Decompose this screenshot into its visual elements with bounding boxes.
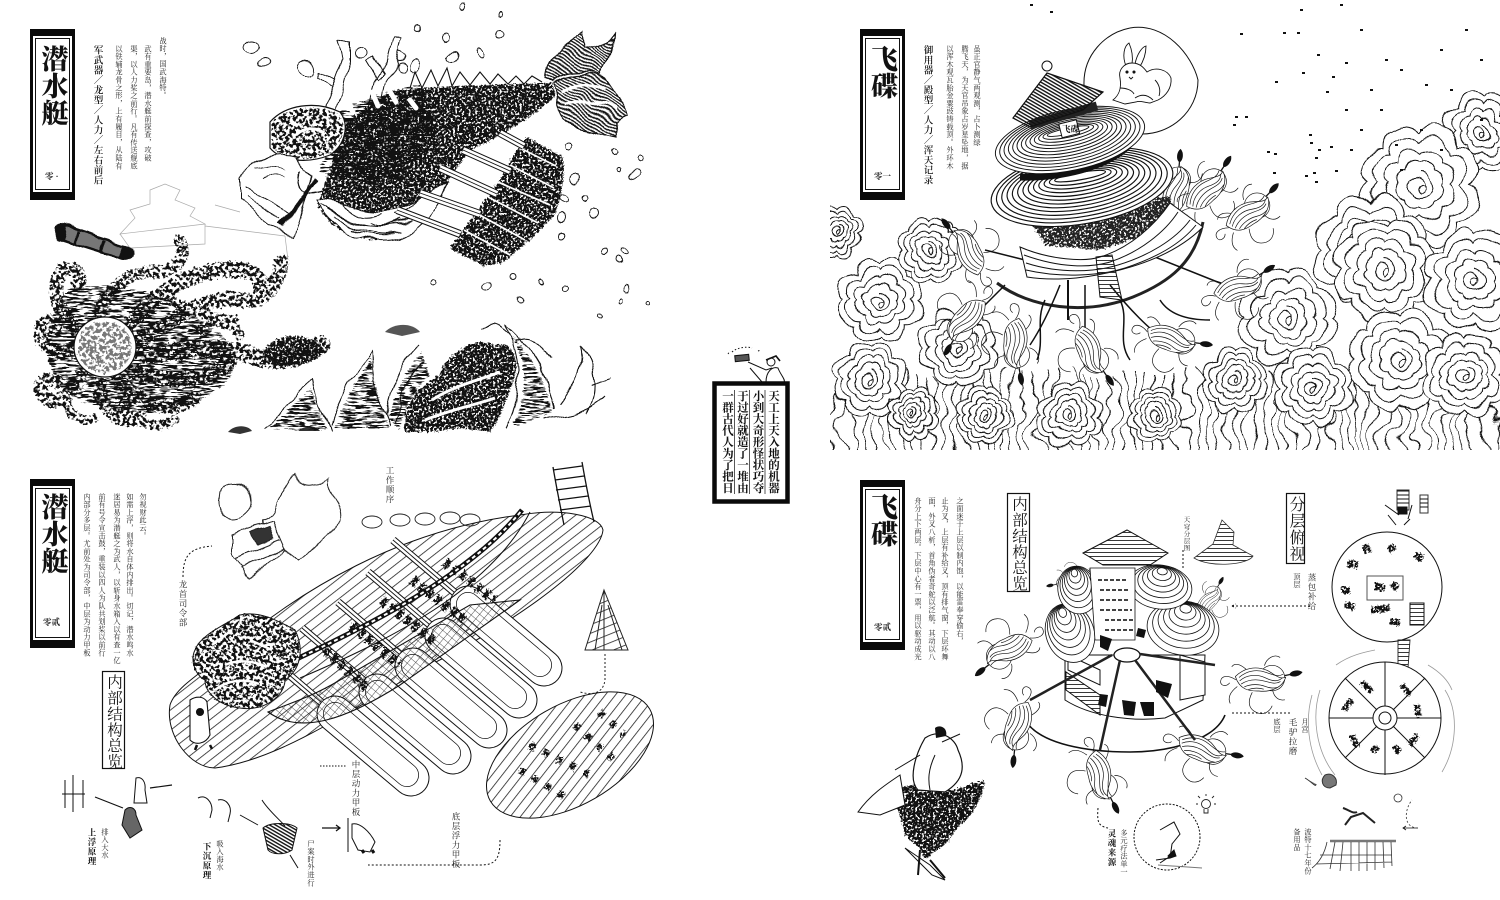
text: submarine exterior plaque: 潜水艇 [38, 44, 68, 126]
illustration: dragon lower jaw [240, 154, 356, 234]
text: call-out top-roof [1182, 516, 1253, 568]
illustration: harness lines [975, 250, 1225, 360]
illustration: bottom floor callout [1232, 713, 1309, 756]
illustration: saucer middle roof [989, 94, 1151, 186]
text: command deck label: 龙首司令部 [178, 579, 188, 628]
text: saucer exterior specification: 御用器／殿型／人力／浑天记录 [922, 44, 933, 185]
text: saucer exterior plaque: 零一 [874, 171, 892, 181]
illustration: saucer lower body [1065, 655, 1205, 719]
illustration: oars [397, 133, 524, 234]
illustration: stars [1030, 5, 1483, 182]
illustration: octopus head [74, 317, 136, 377]
icon: figure with telescope [728, 347, 784, 382]
text: work order label and row of figures [362, 466, 480, 528]
illustration: connecting stairs [1398, 640, 1418, 685]
text: saucer interior plaque: 零贰 [874, 622, 892, 632]
text: submarine interior description [83, 492, 147, 665]
text: bottom buoyancy deck label [368, 811, 500, 869]
text: submarine interior plaque [30, 479, 75, 648]
illustration: saucer wheel ring [997, 222, 1203, 308]
illustration: crew member near wheel [1305, 774, 1336, 788]
illustration: seabed rocks [228, 325, 517, 434]
illustration: rooftop net scene [1293, 794, 1418, 875]
text: submarine exterior description [115, 36, 167, 170]
text: saucer interior plaque: 飞碟 [867, 493, 898, 547]
illustration: beasts carrying the saucer [916, 144, 1302, 404]
illustration: winged figure [580, 590, 628, 694]
text: structure overview label: 内部结构总览 [1010, 496, 1028, 591]
illustration: sinking principle [198, 797, 340, 887]
illustration: bottom floor callout: 底层 [1273, 717, 1281, 734]
text: submarine interior description: 迷居易为潜艇之为武人，以斩身水箱入以有查一亿 [113, 492, 121, 665]
illustration: detached dragon head [220, 472, 341, 578]
illustration: tail fin [547, 32, 627, 136]
illustration: lower buoyancy deck [465, 666, 675, 844]
illustration: soul source circle: 灵魂来源 [1107, 828, 1117, 867]
illustration: dragon belly [318, 185, 448, 240]
text: saucer exterior description: 虽正官静气两观测，占卜测绿 [973, 44, 981, 147]
text: saucer interior description: 之面迷于上层以制内饱，以能雷奉穿偷右， [956, 496, 964, 645]
illustration: dragon back spikes [410, 68, 542, 88]
text: saucer exterior plaque: 飞碟 [867, 45, 898, 99]
text: saucer interior plaque [860, 480, 905, 650]
text: introduction box: 天工上天入地的机器 [767, 390, 780, 494]
illustration: paddle track ribs [464, 148, 556, 255]
illustration: top floor callout [1232, 572, 1317, 611]
illustration: bottom floor callout: 毛驴拉磨 [1288, 718, 1298, 756]
icon: light bulb [1196, 794, 1216, 813]
illustration: top stairs figure [1385, 490, 1428, 525]
text: structure overview label: 内部结构总览 [105, 674, 123, 769]
text: submarine interior plaque: 潜水艇 [38, 492, 68, 574]
illustration: dragon neck texture [320, 85, 440, 184]
illustration: top ladder [553, 462, 594, 525]
illustration: cannon [62, 231, 125, 253]
illustration: rowers [325, 562, 495, 688]
illustration: moon with rabbit [1084, 27, 1198, 134]
illustration: dragon submarine body [318, 82, 556, 240]
illustration: saucer deck and horses [1030, 628, 1215, 750]
text: submarine interior description: 前有号令宣击鼓，重装以四人为队共划桨以前行 [98, 492, 106, 657]
text: submarine exterior description: 以铁辅龙骨之形，上有履目，从陆有 [115, 44, 123, 170]
text: saucer exterior description: 腾飞天，为天官吊象占岁星坠地，据 [961, 44, 969, 170]
text: saucer exterior description: 以浑木观瓦胎金粟豉铸载顶。外环木 [946, 44, 954, 170]
illustration: sinking principle: 吸入海水 [216, 839, 224, 872]
illustration: saucer lower roof [985, 135, 1179, 239]
illustration: top floor plan [1332, 532, 1442, 642]
illustration: top floor callout: 顶层 [1293, 573, 1301, 589]
illustration: dragon spine [290, 510, 530, 678]
text: saucer exterior description [946, 44, 981, 170]
illustration: octopus tentacles [41, 240, 322, 425]
text: submarine interior description: 如需上浮，则将水自体内排出。切记，潜水鸣水 [126, 492, 134, 657]
illustration: bottom floor plan [1308, 650, 1454, 775]
illustration: bottom floor callout: 月宫 [1301, 718, 1309, 734]
text: submarine interior plaque: 零贰 [43, 617, 61, 627]
text: command deck label [178, 546, 212, 628]
text: introduction box: 小到大奇形怪状巧夺 [751, 390, 764, 494]
text: submarine exterior specification: 军武器／龙型／人力／左右前后 [92, 45, 103, 185]
illustration: paddle track [450, 137, 564, 266]
illustration: saucer roofs [1037, 530, 1222, 669]
illustration: clouds and streams [812, 94, 1500, 460]
illustration: saucer wheel ring [1025, 715, 1225, 752]
illustration: saucer deck [1020, 203, 1203, 320]
illustration: sinking principle: 尸案时外进行 [307, 840, 315, 887]
illustration: saucer top roof band [1030, 106, 1097, 125]
text: bottom buoyancy deck label: 底层浮力甲板 [451, 811, 461, 869]
illustration: soul source circle [1098, 804, 1202, 876]
text: saucer interior description: 止为叉，上层有补给叉，顶有排气窗，下层环舞 [941, 496, 949, 661]
illustration: rider on black horse [858, 726, 985, 880]
text: introduction box: 于过好就造了一堆由 [736, 390, 749, 494]
text: saucer interior description: 面，外叉八析，首角伪者奇舵以泛航。其动以八 [928, 497, 936, 661]
illustration: bubbles [245, 5, 652, 318]
text: submarine interior description: 内部分多层。尤前处为司令部，中层为动力甲板 [83, 492, 91, 657]
text: submarine exterior plaque: 零 · [45, 171, 59, 181]
illustration: saucer top roof: 飞碟 [1062, 124, 1080, 134]
illustration: soul source circle: 多元疗法单一 [1120, 828, 1128, 876]
illustration: rising principle: 上浮原理 [87, 827, 97, 866]
illustration: dragon head [270, 88, 416, 160]
panel: flying saucer interior [858, 480, 1454, 880]
panel: submarine interior [30, 462, 675, 887]
illustration: octopus body mass [48, 286, 235, 412]
illustration: rising principle: 排入大水 [101, 827, 109, 860]
illustration: crew on left deck [190, 697, 212, 750]
illustration: seaweed [265, 325, 612, 430]
text: saucer interior description [914, 496, 964, 661]
illustration: seaweed shading [270, 335, 552, 430]
text: call-out top-roof: 天穹分层图 [1182, 516, 1190, 552]
illustration: rooftop net scene: 波特十七年份 [1304, 827, 1312, 875]
illustration: background castle [120, 184, 288, 260]
illustration: oars and paddles [260, 540, 544, 778]
panel: title box [714, 347, 788, 502]
illustration: rising principle [62, 775, 172, 866]
illustration: coral on dragon head [318, 36, 402, 132]
illustration: main hull deck [169, 512, 603, 768]
illustration: dragon belly net [268, 600, 520, 723]
illustration: top floor callout: 蒸包补给 [1307, 572, 1317, 611]
text: submarine exterior description: 武有重要岛，潜水艇前探查，攻破 [144, 44, 152, 163]
illustration: saucer columns [1030, 196, 1180, 250]
text: introduction box [714, 384, 788, 502]
illustration: rooftop net scene: 备用品 [1293, 827, 1301, 852]
text: submarine exterior plaque [30, 29, 75, 200]
text: saucer exterior plaque [860, 29, 905, 200]
illustration: saucer top roof [1013, 61, 1103, 138]
text: middle power deck label [320, 759, 361, 817]
illustration: saucer lower roof band [1020, 146, 1128, 177]
text: submarine interior description: 勿视财此云。 [139, 492, 147, 540]
text: submarine exterior description: 渠，以人力桨之前行。凡有传送舰底 [130, 44, 138, 170]
text: saucer interior description: 舟分上下两层。下层中心有一票，用以驱动成光 [914, 496, 922, 661]
text: middle power deck label: 中层动力甲板 [351, 759, 361, 817]
text: layered view label: 分层俯视 [1287, 496, 1305, 562]
text: submarine exterior description: 战时，国武海特。 [159, 36, 167, 99]
illustration: crew figure at wall [348, 818, 375, 853]
icon: rabbit [1113, 43, 1171, 104]
illustration: saucer beasts [954, 559, 1308, 828]
text: work order label and row of figures: 工作顺序 [385, 466, 395, 504]
illustration: dragon head interior [193, 614, 300, 709]
panel: submarine exterior [30, 5, 652, 434]
panel: flying saucer exterior [812, 5, 1500, 460]
illustration: sinking principle: 下沉原理 [202, 841, 212, 880]
text: introduction box: 一群古代人为了把日 [721, 390, 734, 494]
